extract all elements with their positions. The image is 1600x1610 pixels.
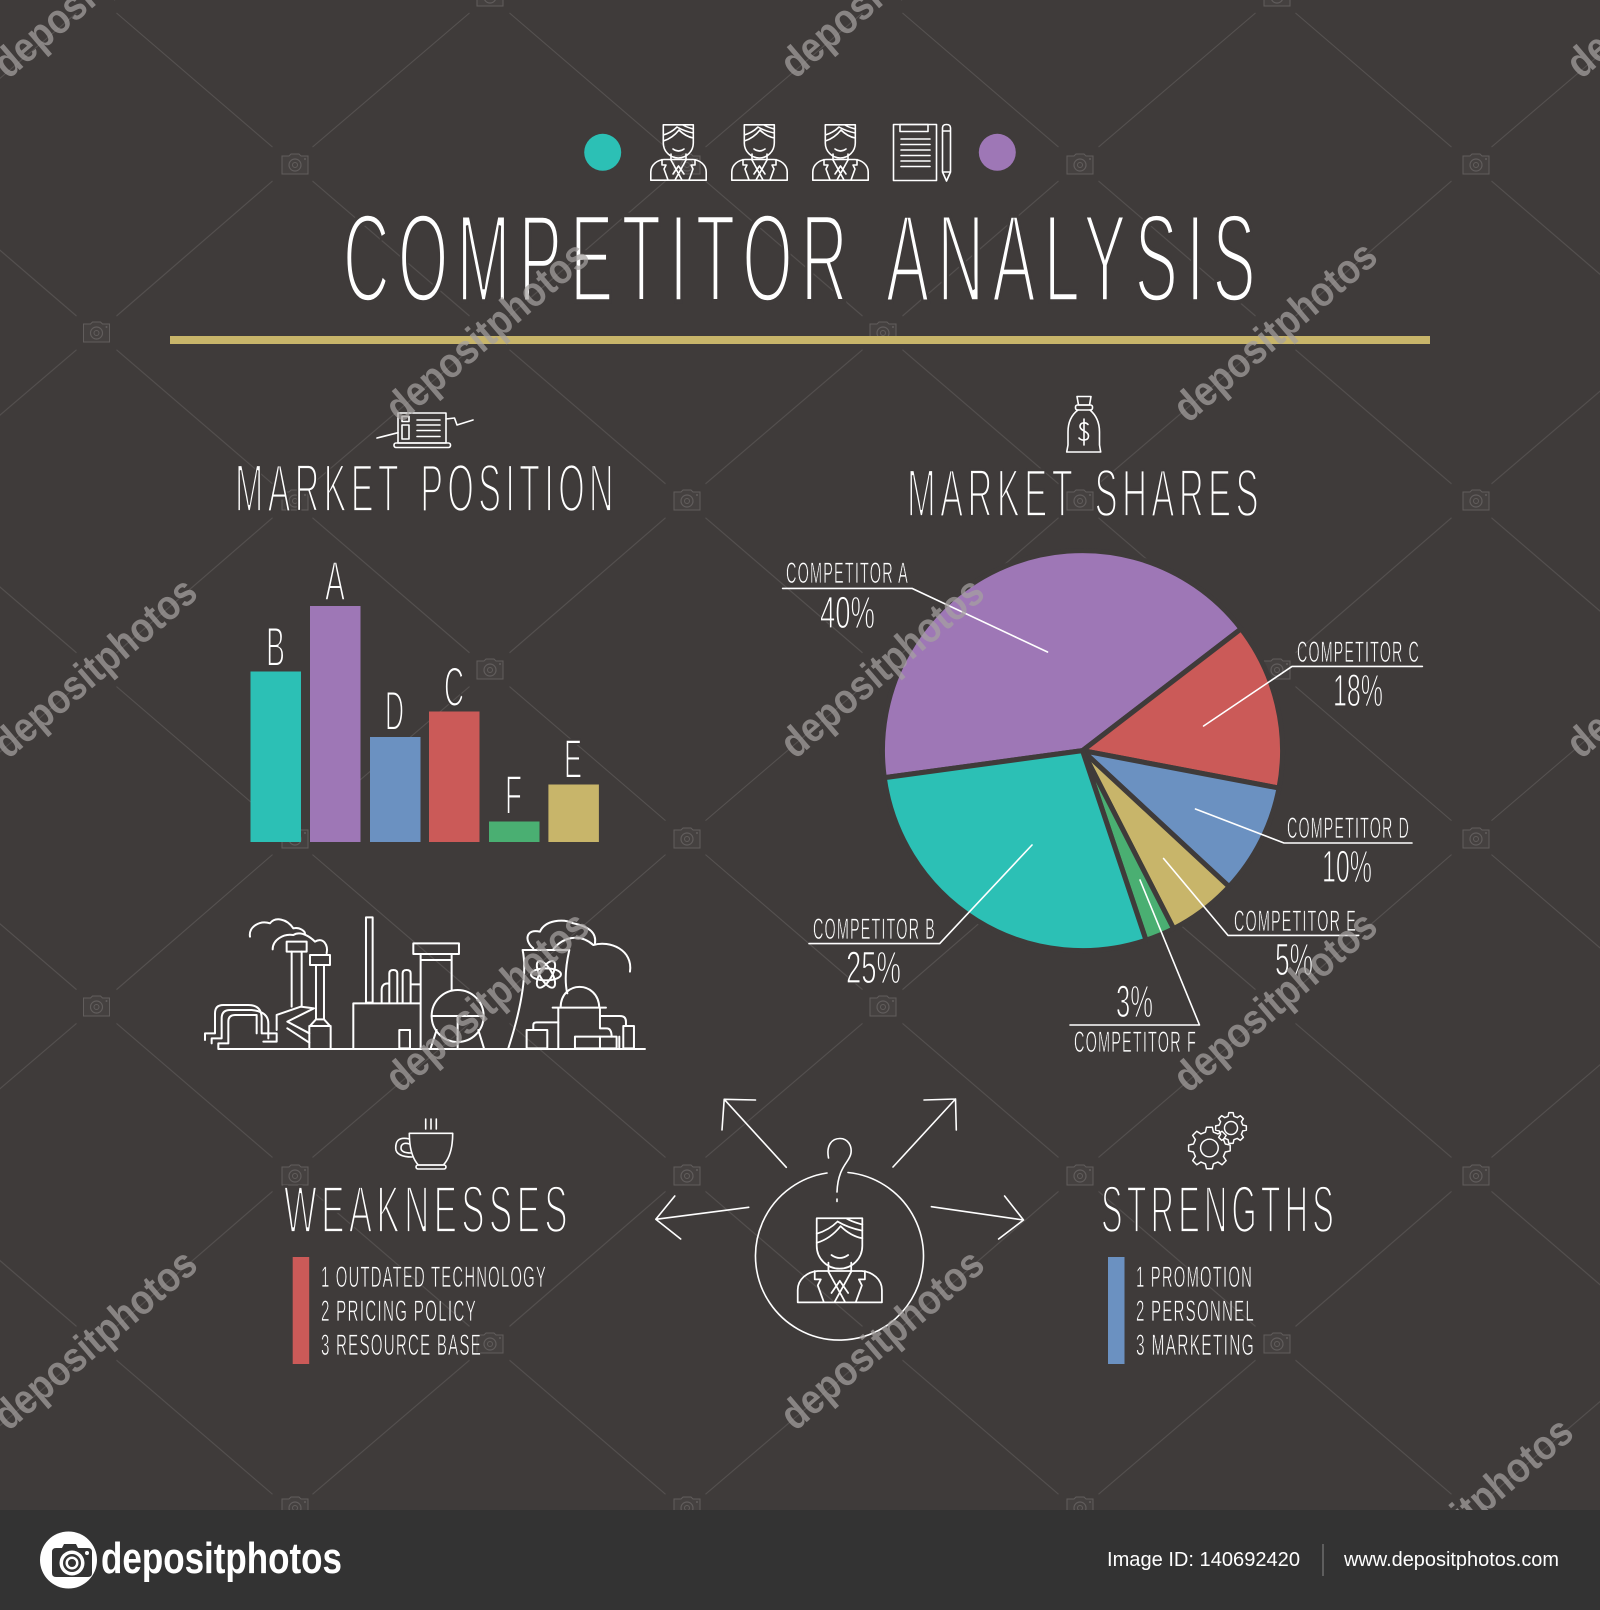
arrow: up left (722, 1099, 786, 1167)
list: strengths (1136, 1261, 1255, 1362)
callout: competitor E (1164, 858, 1359, 985)
logo wordmark: depositphotos (101, 1534, 342, 1583)
panel: market shares (783, 396, 1422, 1059)
bar A (310, 606, 360, 842)
website: www.depositphotos.com (1343, 1549, 1559, 1571)
watermarks: depositphotos (1164, 231, 1386, 431)
bar chart: F (505, 763, 522, 826)
icon: person 1 (651, 125, 706, 180)
icon: teal dot (584, 134, 621, 171)
callout: competitor A: COMPETITOR A (786, 557, 909, 590)
list: weaknesses: 2 PRICING POLICY (321, 1295, 477, 1328)
title underline (170, 336, 1430, 344)
list: strengths: 3 MARKETING (1136, 1329, 1255, 1362)
watermarks: depositphotos (376, 901, 598, 1101)
icon: person (798, 1218, 882, 1302)
question mark (828, 1138, 851, 1202)
bar C (429, 712, 480, 842)
bar F (489, 822, 540, 842)
panel: market position (205, 413, 645, 1049)
callout: competitor D (1196, 809, 1412, 892)
panel: header (170, 124, 1430, 344)
image id: Image ID: 140692420 (1107, 1549, 1300, 1571)
watermarks: depositphotos (771, 1239, 993, 1439)
list: weaknesses (321, 1261, 547, 1362)
callout: competitor A (783, 557, 1048, 652)
icon: gears (1189, 1113, 1246, 1169)
label B: B (266, 615, 285, 678)
heading: market shares: MARKET SHARES (907, 456, 1263, 532)
callout: competitor B (809, 845, 1032, 993)
icon: money bag (1067, 396, 1101, 452)
callout: competitor A: 40% (820, 587, 875, 638)
footer (0, 1510, 1600, 1610)
bar chart: D (385, 679, 404, 742)
bar chart: C (444, 655, 464, 718)
panel: weaknesses: 1 OUTDATED TECHNOLOGY (321, 1261, 547, 1294)
callout: competitor D: 10% (1322, 841, 1372, 892)
slice: competitor B 25% (884, 751, 1146, 951)
slice: competitor D 10% (1082, 751, 1279, 887)
bar chart: E (564, 727, 582, 790)
heading: weaknesses: WEAKNESSES (284, 1172, 572, 1248)
callout: competitor B: 25% (846, 942, 901, 993)
watermarks: depositphotos (376, 231, 598, 431)
list: weaknesses: 3 RESOURCE BASE (321, 1329, 482, 1362)
slice: competitor A 40% (882, 551, 1241, 778)
text: STRENGTHS (1101, 1172, 1338, 1248)
panel: weaknesses (284, 1119, 572, 1364)
callout: competitor C (1204, 636, 1422, 726)
arrow: up right (893, 1099, 956, 1167)
list: strengths: 2 PERSONNEL (1136, 1295, 1255, 1328)
colour bar: red (293, 1257, 309, 1364)
callout: competitor F: 3% (1116, 976, 1153, 1027)
bar D (370, 737, 420, 842)
slice: competitor F 3% (1082, 751, 1174, 940)
slice: competitor E 5% (1082, 751, 1229, 929)
circle around person (755, 1172, 923, 1340)
list: strengths: 1 PROMOTION (1136, 1261, 1253, 1294)
icon: person 3 (813, 125, 868, 180)
pie chart (882, 551, 1283, 951)
bar chart (250, 549, 599, 842)
bar B (250, 672, 301, 842)
logo mark (40, 1532, 97, 1588)
icon: purple dot (979, 134, 1016, 171)
icon: machine (377, 413, 473, 448)
text: COMPETITOR C (1297, 636, 1420, 669)
panel: market shares: COMPETITOR F (1074, 1026, 1197, 1059)
panel: market shares: COMPETITOR D (1287, 812, 1410, 845)
panel: central question figure (656, 1099, 1024, 1340)
illustration: industrial skyline (205, 917, 645, 1049)
panel: market shares: COMPETITOR E (1234, 905, 1357, 938)
label A: A (325, 549, 345, 612)
bar E (548, 784, 599, 842)
callout: competitor E: 5% (1275, 934, 1313, 985)
icon: person 2 (732, 125, 787, 180)
callout: competitor F (1070, 880, 1200, 1059)
callout: competitor C: 18% (1333, 665, 1383, 716)
callout: competitor B: COMPETITOR B (813, 913, 936, 946)
watermarks: depositphotos (771, 567, 993, 767)
colour bar: blue (1108, 1257, 1124, 1364)
panel: strengths (1101, 1113, 1338, 1364)
icon: clipboard and pencil (894, 124, 950, 181)
icon: coffee cup (396, 1119, 453, 1169)
arrow: right (931, 1196, 1024, 1239)
watermarks: depositphotos (1164, 901, 1386, 1101)
panel: market position: MARKET POSITION (235, 450, 618, 526)
slice: competitor C 18% (1082, 629, 1283, 788)
arrow: left (656, 1196, 749, 1239)
